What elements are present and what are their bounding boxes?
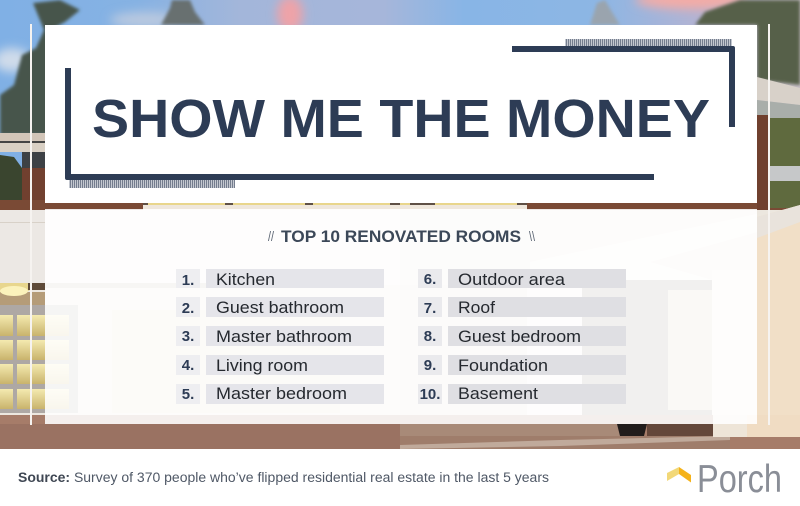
right trees and roof bbox=[695, 0, 800, 85]
garage door left bbox=[0, 305, 78, 413]
icon: roof chevron bbox=[667, 467, 691, 482]
row 2 bbox=[176, 297, 384, 317]
vertical accent line: left bbox=[30, 24, 32, 425]
row 10: Basement bbox=[458, 384, 538, 403]
row 9 bbox=[418, 355, 626, 375]
row 1 bbox=[176, 269, 384, 289]
row 6: Outdoor area bbox=[458, 270, 566, 289]
list: column two bbox=[418, 269, 626, 404]
white wall bbox=[0, 210, 45, 285]
row 3: 3. bbox=[182, 328, 194, 345]
row 7 bbox=[418, 297, 626, 317]
row 7: Roof bbox=[458, 298, 495, 317]
row 1: 1. bbox=[182, 272, 194, 289]
source note: Source: Survey of 370 people who’ve flipped residential real estate in the last 5 years bbox=[18, 470, 549, 485]
driveway bbox=[0, 415, 800, 449]
porch behind panel bbox=[400, 285, 527, 415]
row 2: 2. bbox=[182, 300, 194, 317]
row 1: Kitchen bbox=[216, 270, 275, 289]
row 2: Guest bathroom bbox=[216, 298, 344, 317]
row 9: Foundation bbox=[458, 356, 548, 375]
base wall bbox=[0, 205, 800, 420]
panel: title card bbox=[45, 25, 757, 203]
row 6 bbox=[418, 269, 626, 289]
row 10: 10. bbox=[420, 386, 440, 403]
row 4 bbox=[176, 355, 384, 375]
logo: Porch: Porch bbox=[697, 458, 782, 501]
row 5: Master bedroom bbox=[216, 384, 347, 403]
row 6: 6. bbox=[424, 271, 436, 288]
heading: top 10 renovated rooms: // bbox=[268, 228, 274, 244]
row 8: Guest bedroom bbox=[458, 327, 581, 346]
row 5 bbox=[176, 384, 384, 404]
decorative frame with hatching bbox=[65, 39, 735, 188]
row 8: 8. bbox=[424, 328, 436, 345]
footer band bbox=[0, 449, 800, 506]
row 8 bbox=[418, 326, 626, 346]
row 4: Living room bbox=[216, 356, 308, 375]
row 3 bbox=[176, 326, 384, 346]
row 3: Master bathroom bbox=[216, 327, 352, 346]
title: SHOW ME THE MONEY bbox=[92, 89, 710, 149]
logo: Porch bbox=[667, 458, 782, 501]
row 4: 4. bbox=[182, 357, 194, 374]
brick strip under title card bbox=[0, 200, 800, 210]
row 10 bbox=[418, 384, 626, 404]
list: column one bbox=[176, 269, 384, 404]
row 9: 9. bbox=[424, 357, 436, 374]
vertical accent line: right bbox=[768, 24, 770, 425]
heading: top 10 renovated rooms: \\ bbox=[529, 228, 535, 244]
left trees bbox=[0, 0, 620, 135]
heading: top 10 renovated rooms: TOP 10 RENOVATED ROOMS bbox=[281, 228, 521, 246]
row 5: 5. bbox=[182, 386, 194, 403]
panel: translucent list background bbox=[45, 209, 757, 424]
row 7: 7. bbox=[424, 300, 436, 317]
